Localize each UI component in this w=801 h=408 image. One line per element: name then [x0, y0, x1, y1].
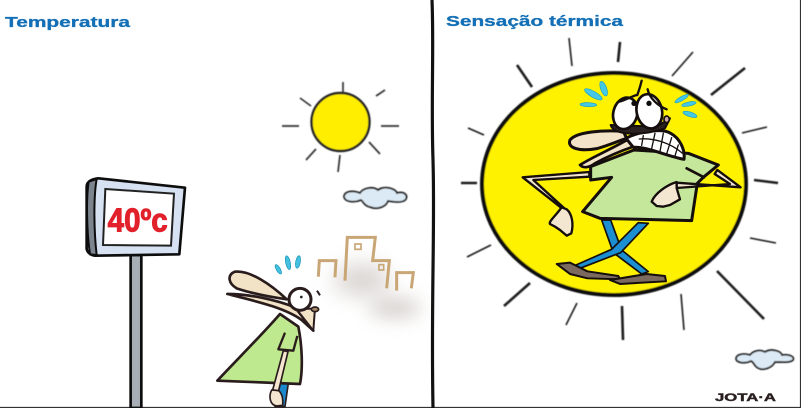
- right arm: [677, 170, 741, 188]
- panel divider: [432, 0, 434, 408]
- shoes: [557, 263, 666, 284]
- heading: Sensação térmica: Sensação térmica: [446, 13, 624, 30]
- signature: JOTA·A: [715, 392, 776, 404]
- left arm: [523, 172, 589, 209]
- teeth: [626, 131, 684, 159]
- icon: lower right cloud: [736, 350, 793, 369]
- icon: big sun rays: [461, 38, 778, 340]
- legs: [576, 220, 648, 274]
- sign box: [87, 178, 185, 256]
- sign: 40°C: [87, 178, 185, 408]
- character: sweating figure in sun: [523, 81, 741, 284]
- sign temperature reading: 40ºc: [108, 203, 168, 240]
- icon: small sun: [282, 82, 399, 172]
- hat: [569, 131, 627, 150]
- character: small figure looking up: [217, 272, 320, 407]
- sign pole: [131, 255, 141, 408]
- hat: [230, 272, 287, 299]
- shirt: [217, 314, 302, 384]
- arm and hand: [273, 351, 288, 391]
- heading: Temperatura: Temperatura: [5, 14, 131, 31]
- head and eyes: [611, 118, 670, 134]
- shirt: [583, 150, 718, 221]
- distant city skyline: [318, 237, 413, 291]
- icon: big sun: [482, 73, 746, 295]
- face: [297, 308, 315, 331]
- smudge behind city: [334, 264, 421, 318]
- hair and brows: [619, 81, 667, 109]
- sweat drops: [274, 255, 301, 275]
- icon: small cloud: [344, 188, 407, 208]
- sweat drops: big figure: [580, 80, 698, 119]
- legs: [275, 383, 288, 407]
